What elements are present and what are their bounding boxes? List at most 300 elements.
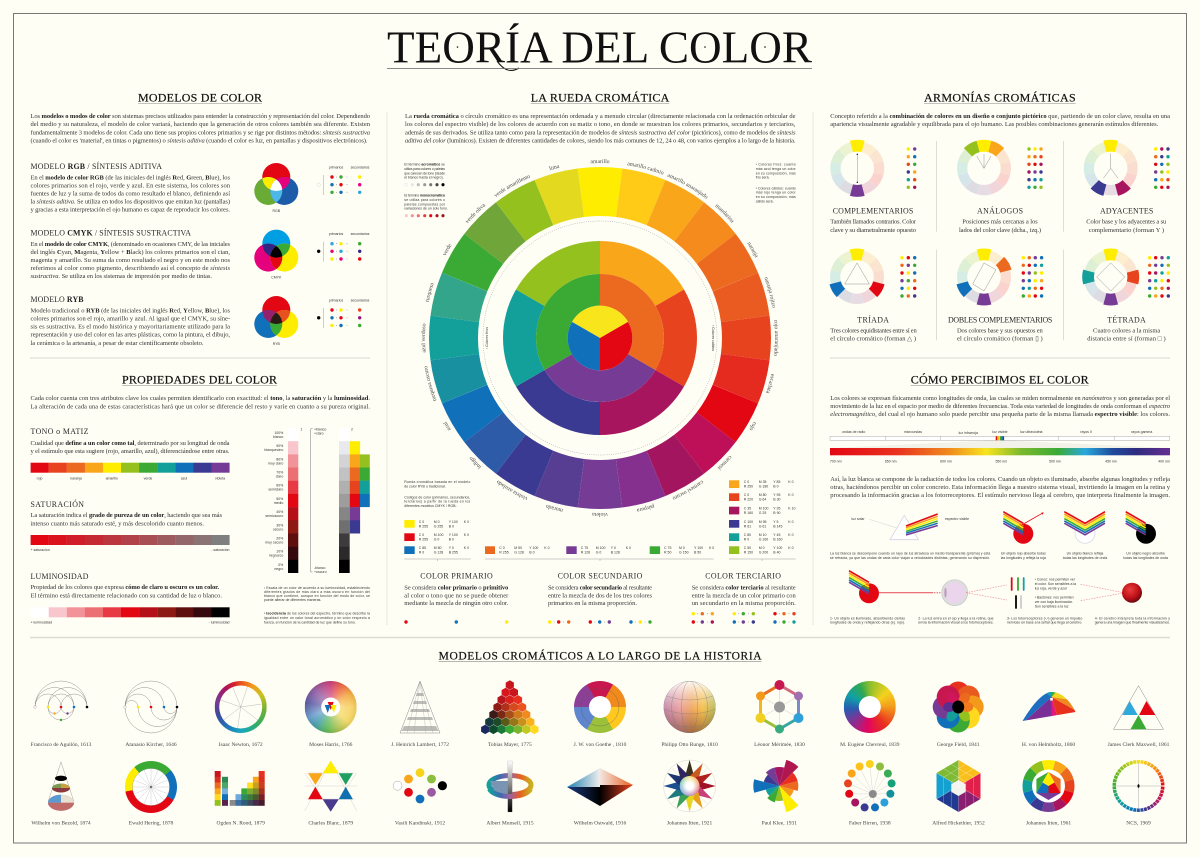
color codes: primary: K 0 [464, 520, 469, 524]
diagram: vision process [830, 571, 1170, 624]
color codes: primary: M 50 [434, 546, 442, 550]
outer ring labels: lima [548, 165, 560, 170]
block: color terciario: Se considera color terciario al resultante [692, 584, 796, 592]
model: Rood: Ogden N. Rood, 1879 [216, 820, 265, 826]
color codes: tertiary: R 150 [744, 550, 753, 554]
note: colores fríos y cálidos: en su composición, más [756, 195, 796, 199]
color codes: tertiary: B 40 [773, 550, 781, 554]
model: Birren [844, 760, 896, 826]
note: monocromático: variaciones de un solo tono. [404, 207, 448, 211]
intro text [30, 113, 371, 144]
model: Mayer [481, 680, 538, 748]
chart: luminosity scale: negro [274, 567, 283, 571]
model: Helmholtz: H. von Helmholtz, 1860 [1022, 742, 1075, 748]
model: Maxwell: James Clerk Maxwell, 1861 [1108, 742, 1170, 748]
color codes: primary: B 0 [449, 538, 454, 542]
intro text: del medio y su naturaleza, el modelo de color variará, haciendo que la generación de otros colores también sea diferente. Existen [30, 121, 371, 128]
outer ring labels: carmesí oscuro [672, 480, 703, 500]
color codes: secondary: Y 100 [694, 546, 703, 550]
harmony: complementarios: COMPLEMENTARIOS [833, 206, 913, 216]
color codes: tertiary: B 160 [773, 538, 782, 542]
diagram: vision process: longitudes de onda y reflejando otras (ej. rojo). [830, 620, 905, 624]
venn diagram: CMYK [254, 230, 298, 280]
heading: cómo percibimos el color: CÓMO PERCIBIMOS EL COLOR [911, 372, 1089, 386]
chart: luminosity scale: semiclaro [268, 488, 283, 492]
outer ring: 24 hues [429, 167, 771, 509]
color codes: tertiary: B 30 [773, 498, 781, 502]
note: colores fríos y cálidos: ² Colores cálidos: cuanto [756, 186, 796, 190]
color codes: tertiary: G 25 [759, 511, 766, 515]
heading: modelos cromáticos: MODELOS CROMÁTICOS A LO LARGO DE LA HISTORIA [439, 648, 762, 662]
visible spectrum gradient [830, 448, 1170, 464]
intro text [830, 395, 1171, 418]
footnotes: scale: igualdad entre un valor tonal acromático y un color respecto a [264, 616, 370, 620]
color codes: secondary: M 50 [514, 546, 522, 550]
harmony: dobles complementarios: Dos colores base y sus opuestos en [957, 328, 1043, 335]
outer ring labels: rojo [750, 422, 756, 430]
color codes: tertiary: K 0 [788, 520, 794, 524]
model: Lambert: J. Heinrich Lambert, 1772 [391, 742, 449, 748]
intro text: Cada color cuenta con tres atributos clave los cuales permiten identificarlo con exactitud: el tono, la saturación y la luminosidad. [30, 395, 370, 402]
color codes: primary: C 0 [419, 533, 424, 537]
model: Lambert [391, 681, 449, 748]
luminosidad text [30, 572, 222, 600]
color codes: tertiary: Y 45 [773, 533, 780, 537]
electromagnetic spectrum bar: microondas [904, 430, 922, 434]
color codes: primary: G 0 [434, 538, 439, 542]
bar: tono: verde [144, 476, 152, 480]
color codes: primary: M 100 [434, 533, 443, 537]
color codes: secondary: Y 100 [529, 546, 538, 550]
note: colores fríos y cálidos: más rojo tenga un color [756, 191, 797, 195]
color codes: primary: Y 100 [449, 520, 458, 524]
panel: modelos cromáticos a lo largo de la historia [31, 648, 1170, 826]
intro text: apariencia visualmente agradable y equilibrada para el ojo humano. Las posibles combinaciones generarán estímulos diferentes. [830, 121, 1159, 128]
diagram: vision process: ² Bastones: nos permiten [1035, 595, 1074, 599]
color sums: CMYK [317, 232, 370, 262]
color codes: secondary: G 150 [679, 550, 689, 554]
bar: luminosidad [30, 607, 230, 624]
color sums: RGB: secundarios [351, 166, 370, 170]
diagram: vision process: 1- Un objeto es iluminado, absorbiendo ciertas [830, 616, 905, 620]
outer ring labels: verde oliva [466, 204, 486, 223]
model: Aguilón: Francisco de Aguilón, 1613 [31, 742, 92, 748]
chart: luminosity scale: oscuro [273, 527, 283, 531]
footnotes: scale: diferentes grados de más claro a más oscuro en función del [264, 590, 370, 594]
diagram: prism: se refracta, ya que las ondas de cada color viajan a velocidades distintas, generando su dispersión. [830, 556, 990, 560]
primary center [558, 306, 642, 378]
color codes: secondary: R 128 [581, 550, 590, 554]
note: monocromático: se utiliza para colores o [404, 198, 445, 202]
model: Klee [753, 759, 799, 826]
model: Mérimée: Léonor Mérimée, 1830 [754, 742, 805, 748]
color codes: tertiary: G 64 [759, 498, 766, 502]
visible spectrum gradient: 450 nm [1105, 460, 1117, 464]
model: Harris [305, 681, 357, 748]
outer ring labels: rojo anaranjado [773, 320, 779, 356]
color sums: RGB [317, 166, 370, 195]
modelo RGB text [30, 161, 231, 214]
diagram: vision process: 2- La luz entra en el ojo y llega a la retina, que [918, 616, 994, 620]
modelo RYB text: la cerámica o la artesanía, a pesar de estar científicamente obsoleto. [30, 340, 204, 347]
color codes: tertiary: M 10 [759, 533, 767, 537]
chart: luminosity scale: +claro [314, 432, 324, 436]
modelo RGB text: la síntesis aditiva. Se utiliza en todos los dispositivos que emitan luz (pantallas) [30, 198, 230, 206]
diagram: white object [1063, 512, 1107, 560]
note: colores fríos y cálidos: ¹ Colores fríos: cuanto [756, 163, 796, 167]
outer ring labels: índigo [470, 457, 482, 470]
chart: luminosity scale: muy oscuro [265, 540, 283, 544]
color codes: secondary: R 50 [664, 550, 671, 554]
outer ring labels: violeta [592, 512, 608, 517]
luminosidad text: Propiedad de los colores que expresa cómo de claro u oscuro es un color. [30, 584, 219, 591]
color codes: primary: G 255 [434, 524, 443, 528]
chart: luminosity scale [264, 428, 370, 574]
model: Itten 1921 [664, 760, 716, 826]
color codes: tertiary: G 160 [759, 538, 768, 542]
note: colores fríos y cálidos: más azul tenga un color [756, 167, 797, 171]
color codes: tertiary: M 95 [759, 520, 767, 524]
outer ring labels: naranja rojizo [764, 276, 775, 308]
color codes: primary: K 0 [464, 546, 469, 550]
intro text: (cuando el color es 'material', en tintas o pigmentos) o síntesis aditiva (cuando el color es luz, en pantallas y dispositivos electrónicos). [30, 137, 368, 144]
tono text [30, 427, 230, 455]
footnotes: scale: ² Isocidencia de los colores del espectro, término que describe la [264, 612, 370, 616]
harmony: análogos: lados del color clave (dcha., izq.) [959, 227, 1041, 234]
diagram: vision process: genera una imagen que finalmente visualizamos. [1095, 620, 1170, 624]
diagram: prism: La luz blanca se descompone cuando un rayo de luz atraviesa un medio transparente (prisma) y esta [830, 552, 990, 556]
color codes: tertiary [729, 480, 796, 554]
explanation text: Así, la luz blanca se compone de la radiación de todos los colores. Cuando un objeto es iluminado, absorbe algunas longitudes y refleja [830, 476, 1170, 483]
color codes: tertiary: K 0 [788, 533, 794, 537]
model: Kandinski: Vasili Kandinski, 1912 [395, 820, 445, 826]
explanation text: otras, haciéndonos percibir un color concreto. Esta información llega a nuestro sistema visual, invirtiendo la imagen en la retina y [830, 484, 1171, 491]
model: Aguilón [31, 681, 92, 748]
note: acromático: que carecen de tono (desde [404, 171, 445, 175]
bar: tono: azul [181, 476, 187, 480]
chart: luminosity scale: 30% [276, 523, 283, 527]
modelo RYB text: colores primarios son el rojo, amarillo y azul. Al igual que el CMYK, su síne- [30, 316, 230, 322]
outer ring labels: morado [546, 505, 563, 512]
model: Hering: Ewald Hering, 1878 [129, 820, 173, 826]
bar: saturación: + saturación [30, 548, 50, 552]
diagram: prism [830, 514, 990, 560]
harmony: tríada: el círculo cromático (forman △ ) [830, 336, 916, 343]
color codes: primary: B 255 [449, 550, 458, 554]
diagram: prism: espectro visible [945, 517, 969, 521]
diagram: vision process: el color. Son sensibles a la [1035, 582, 1076, 586]
intro text: Los colores se expresan físicamente como longitudes de onda, las cuales se miden normalmente en nanómetros y son generadas por el [830, 395, 1170, 402]
panel: la rueda cromática [404, 90, 797, 624]
diagram: black object: todas las longitudes de onda [1123, 556, 1168, 560]
color sums: CMYK: primarios [329, 232, 343, 236]
note: acromático [404, 163, 445, 186]
diagram: vision process: envía la información visual a los fotorreceptores. [918, 620, 994, 624]
chart: luminosity scale: muy claro [268, 461, 283, 465]
color codes: tertiary: B 0 [773, 484, 779, 488]
block: color secundario: entre la mezcla de dos de los tres colores [548, 592, 652, 599]
block: color primario: mediante la mezcla de ningún otro color. [404, 600, 509, 607]
electromagnetic spectrum bar: luz ultravioleta [1020, 430, 1043, 434]
harmony: tétrada: Cuatro colores a la misma [1093, 328, 1160, 335]
diagram: prism: luz solar [851, 517, 865, 521]
color codes: secondary: K 0 [709, 546, 714, 550]
harmony: análogos: Posiciones más cercanas a los [962, 219, 1038, 226]
diagram: red object: las longitudes y refleja la roja [1001, 556, 1046, 560]
color sums: RYB: primarios [329, 298, 343, 302]
color codes: secondary: R 255 [499, 550, 509, 554]
saturación text: La saturación indica el grado de pureza de un color, haciendo que sea más [30, 512, 222, 519]
chart: luminosity scale: semioscuro [265, 514, 283, 518]
color codes: secondary: M 100 [596, 546, 605, 550]
outer ring labels: amarillo [590, 159, 610, 164]
color codes: secondary: B 0 [529, 550, 535, 554]
color sums: RGB: primarios [329, 166, 343, 170]
harmony: análogos: ANÁLOGOS [977, 206, 1023, 216]
harmony: tétrada [1082, 248, 1170, 343]
bar: tono: naranja [70, 476, 82, 480]
color codes: secondary: K 0 [626, 546, 631, 550]
intro text: fundamentalmente 3 modelos de color. Cada uno tiene sus propios colores primarios y se rige por distintos métodos: síntesis sustractiva [30, 129, 370, 136]
footnotes: scale: puede alterar de diferentes maneras. [264, 598, 321, 602]
chart: luminosity scale: claro [276, 475, 283, 479]
color codes: primary: C 0 [419, 520, 424, 524]
note: rueda base: Códigos de color (primarios, secundarios, [404, 496, 470, 500]
note: monocromático: paletas compuestas por [404, 203, 446, 207]
modelo CMYK text: sustractiva. Se utiliza en los sistemas de impresión por medio de tintas. [30, 273, 212, 280]
label: colores fríos: ¹ Colores fríos [485, 327, 489, 349]
panel: modelos de color [30, 90, 371, 347]
color codes: tertiary: R 250 [744, 484, 753, 488]
intro text: movimiento de la luz en el espacio por medio de diferentes frecuencias. Toda esta variedad de longitudes de onda conforman el espectro [830, 403, 1171, 410]
diagram: vision process: 4- El cerebro interpreta toda la información y [1095, 616, 1170, 620]
color codes: primary: R 255 [419, 538, 428, 542]
outer ring labels: azul [443, 422, 450, 430]
color codes: tertiary: K 10 [788, 506, 796, 510]
harmony: adyacentes: ADYACENTES [1100, 206, 1153, 216]
chart: luminosity scale: 20% [276, 536, 283, 540]
bar: tono: amarillo [106, 476, 118, 480]
chart: luminosity scale: 50% [276, 497, 283, 501]
diagram: white object: todas las longitudes de onda [1063, 556, 1107, 560]
block: color secundario: primarios en la misma proporción. [548, 600, 637, 607]
chart: luminosity scale: 10% [276, 550, 283, 554]
intro text: aditiva del color (lumínicos). Existen de diferentes cantidades de colores, siendo los más comunes de 12, 24 o 48, con varios ejemplos a lo largo de la historia. [405, 137, 796, 144]
color codes: tertiary: M 35 [759, 480, 767, 484]
color codes: primary: R 255 [419, 524, 428, 528]
modelo RGB text: En el modelo de color RGB (de las iniciales del inglés Red, Green, Blue), los [30, 174, 230, 182]
electromagnetic spectrum bar: ondas de radio [842, 430, 865, 434]
model: Kircher: Atanasio Kircher, 1646 [125, 742, 177, 748]
model: Runge [661, 681, 718, 748]
electromagnetic spectrum bar: rayos X [1080, 430, 1093, 434]
color codes: tertiary: Y 5 [773, 520, 779, 524]
harmony: análogos [957, 140, 1043, 234]
diagram: red object: Un objeto rojo absorbe todas [1001, 552, 1046, 556]
chart: luminosity scale: 60% [276, 484, 283, 488]
footnotes: scale [264, 586, 370, 624]
model: Itten 1961 [1023, 760, 1074, 826]
outer ring labels: turquesa [426, 283, 434, 302]
saturación text [30, 499, 222, 528]
intro text: Concepto referido a la combinación de colores en un diseño o conjunto pictórico que, partiendo de un color clave, resulta en una [830, 113, 1170, 120]
diagram: black object [1123, 512, 1168, 560]
modelo CMYK text: En el modelo de color CMYK, (denominado en ocasiones CMY, de las iniciales [30, 241, 230, 248]
color codes: secondary: K 0 [544, 546, 550, 550]
visible spectrum gradient: 700 nm [830, 460, 842, 464]
modelo CMYK text: MODELO CMYK / SÍNTESIS SUSTRACTIVA [30, 228, 191, 238]
color codes: tertiary: C 0 [744, 493, 749, 497]
footnotes: scale: fuerza, en función de la cantidad de luz que define su tono. [264, 620, 356, 624]
chart: luminosity scale: medio [274, 501, 283, 505]
harmony: adyacentes [1084, 140, 1170, 234]
modelo RGB text: colores primarios son el rojo, verde y azul. En este sistema, los colores son [30, 182, 231, 190]
model: Hickethier: Alfred Hickethier, 1952 [932, 820, 985, 826]
outer ring labels: verde [443, 244, 452, 255]
model: Munsell: Albert Munsell, 1915 [486, 820, 534, 826]
chart: luminosity scale: +blanco [314, 428, 326, 432]
block: color secundario: COLOR SECUNDARIO [558, 572, 643, 580]
note: acromático: el blanco hasta el negro). [404, 176, 444, 180]
footnotes: scale: blanco que contiene, aunque en función del modo de color, se [264, 594, 370, 598]
color codes: tertiary: K 0 [788, 546, 794, 550]
color codes: secondary: B 50 [694, 550, 701, 554]
harmony: tríada: TRÍADA [857, 314, 889, 324]
diagram: vision process: ¹ Conos: nos permiten ver [1035, 578, 1076, 582]
model: Field [933, 682, 984, 748]
note: colores fríos y cálidos [756, 163, 797, 203]
model: NCS: NCS, 1969 [1126, 820, 1151, 826]
color codes: primary: Y 100 [449, 533, 458, 537]
outer ring labels: escarlata [766, 374, 774, 394]
panel: propiedades del color [30, 372, 370, 624]
note: acromático: El término acromático se [404, 163, 445, 167]
chart: luminosity scale: blanco [273, 435, 283, 439]
color codes: tertiary: C 100 [744, 520, 753, 524]
model: Itten 1921: Johannes Itten, 1921 [667, 820, 713, 826]
note: acromático: utiliza para colores o paletas [404, 167, 445, 171]
panel: cómo percibimos el color [830, 372, 1171, 624]
color codes: tertiary: G 180 [759, 484, 768, 488]
electromagnetic spectrum bar: luz infrarroja [959, 431, 978, 435]
outer ring labels: carmesí [718, 456, 732, 471]
intro text [405, 113, 796, 144]
chart: luminosity scale: 40% [276, 510, 283, 514]
bar: tono: violeta [215, 476, 225, 480]
color codes: tertiary: Y 100 [773, 546, 782, 550]
color codes: secondary: Y 0 [611, 546, 616, 550]
note: rueda base [404, 480, 471, 508]
model: NCS [1112, 760, 1164, 826]
model: Chevreul: M. Eugène Chevreul, 1839 [840, 742, 900, 748]
bar: luminosidad: - luminosidad [209, 620, 230, 624]
model: Newton [215, 681, 267, 748]
note: colores fríos y cálidos: en su composición, más [756, 171, 796, 175]
outer ring labels: amarillo anaranjado [668, 174, 708, 198]
model: Hickethier [932, 760, 985, 826]
block: color secundario: Se considera color secundario al resultante [548, 584, 652, 592]
harmony: tríada: Tres colores equidistantes entre sí en [830, 328, 917, 335]
heading: propiedades del color: PROPIEDADES DEL COLOR [122, 372, 277, 386]
color codes: primary: Y 0 [449, 546, 454, 550]
modelo RYB text: sis es sustractiva. Es el modo histórica y mayoritariamente utilizado para la [30, 324, 230, 330]
chart: luminosity scale: blanquecino [264, 448, 283, 452]
color codes: tertiary: C 35 [744, 506, 751, 510]
model: Helmholtz [1022, 692, 1076, 747]
color codes: secondary: G 128 [514, 550, 524, 554]
intro text: además de sus derivados. Se utiliza tanto como para la representación de modelos de síntesis sustractiva del color (pictóricos), como de modelos de síntesis [405, 129, 796, 136]
modelo CMYK text: magenta y amarillo. Su suma da como resultado el negro y en este modo nos [30, 257, 230, 264]
electromagnetic spectrum bar: rayos gamma [1131, 430, 1152, 434]
model: Hering [125, 761, 177, 826]
model: Harris: Moses Harris, 1766 [309, 742, 353, 748]
diagram: black object: Un objeto negro absorbe [1126, 552, 1165, 556]
modelo RYB text: MODELO RYB [30, 295, 84, 304]
outer ring labels: azul verdoso [421, 324, 426, 352]
color codes: secondary [485, 546, 714, 554]
chart: luminosity scale: 100% [274, 431, 283, 435]
color codes: tertiary: Y 85 [773, 480, 780, 484]
chart: luminosity scale: -blanco [314, 566, 326, 570]
luminosidad text: El término está directamente relacionado con su cantidad de luz o blanco. [30, 592, 222, 600]
bar: luminosidad: + luminosidad [30, 620, 52, 624]
block: color terciario: entre la mezcla de un color primario con [692, 592, 796, 599]
model: Ostwald: Wilhelm Ostwald, 1916 [574, 820, 626, 826]
venn diagram: RGB [254, 163, 298, 213]
modelo RGB text: MODELO RGB / SÍNTESIS ADITIVA [30, 161, 162, 171]
model: Klee: Paul Klee, 1931 [762, 820, 797, 826]
chart: luminosity scale: 2 [351, 428, 353, 432]
block: color terciario [692, 572, 796, 624]
secondary ring [513, 267, 664, 425]
modelo RYB text: Modelo tradicional o RYB (de las iniciales del inglés Red, Yellow, Blue), los [30, 308, 230, 314]
model: Kircher [124, 681, 178, 748]
color codes: primary: M 0 [434, 520, 440, 524]
saturación text: intenso cuanto más saturado esté, y más descolorido cuanto menos. [30, 520, 204, 528]
color codes: tertiary: B 90 [773, 511, 781, 515]
block: color primario: Se considera color primario o primitivo [404, 584, 508, 592]
model: Chevreul [840, 681, 900, 748]
model: Field: George Field, 1841 [937, 742, 980, 748]
intro text [830, 113, 1170, 128]
bar: tono [31, 463, 230, 480]
diagram: vision process: luz roja, verde y azul [1035, 586, 1067, 590]
intro text: Los modelos o modos de color son sistemas precisos utilizados para entender la construcción y representación del color. Dependiendo [30, 113, 370, 120]
outer ring labels: amarillo cadmio [627, 162, 664, 174]
modelo CMYK text: del inglés Cyan, Magenta, Yellow + Black) los colores primarios son el cian, [30, 249, 230, 256]
bar: tono: rojo [37, 476, 42, 480]
bar: saturación: - saturación [211, 548, 230, 552]
tertiary ring [474, 217, 726, 459]
color codes: tertiary: K 0 [788, 480, 794, 484]
model: Runge: Philipp Otto Runge, 1810 [661, 742, 718, 748]
visible spectrum gradient: 550 nm [995, 460, 1007, 464]
visible spectrum gradient: 400 nm [1158, 460, 1170, 464]
heading: modelos de color: MODELOS DE COLOR [138, 90, 262, 104]
harmony: complementarios: clave y su diametralmente opuesto [830, 227, 916, 234]
panel: armonías cromáticas [829, 90, 1170, 343]
harmony: tríada [829, 248, 917, 343]
label: colores cálidos: ² Colores cálidos [711, 325, 715, 351]
color codes: tertiary: R 220 [744, 498, 753, 502]
chart: luminosity scale: 70% [276, 471, 283, 475]
color codes: tertiary: M 80 [759, 493, 767, 497]
color codes: secondary: M 0 [679, 546, 685, 550]
color codes: primary: G 128 [434, 550, 443, 554]
model: Bezold: Wilhelm von Bezold, 1874 [31, 820, 91, 826]
block: color terciario: un secundario en la misma proporción. [692, 600, 796, 607]
harmony: dobles complementarios [948, 248, 1052, 343]
